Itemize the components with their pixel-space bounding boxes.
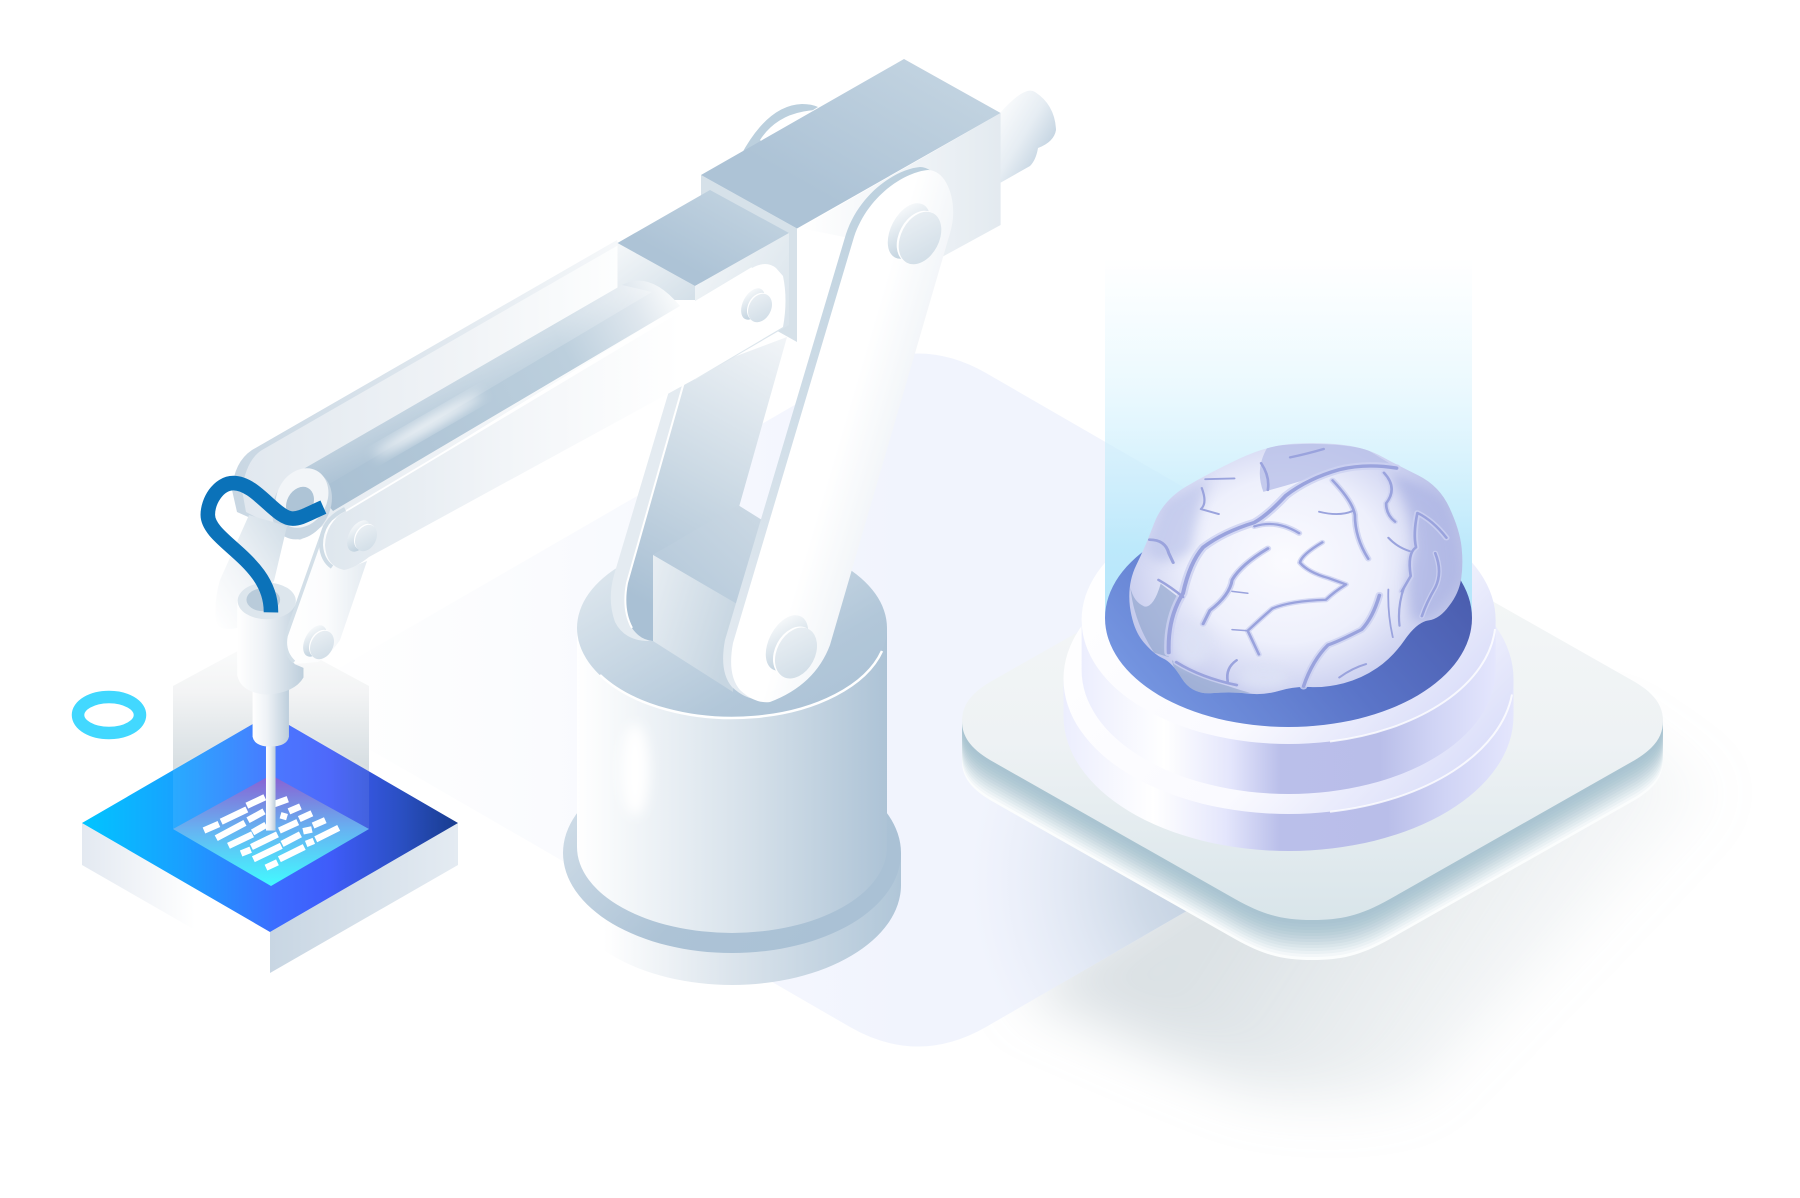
robot base — [563, 538, 901, 985]
bolts — [298, 196, 950, 686]
base highlight — [621, 724, 649, 816]
brain sulci halo — [1169, 466, 1446, 686]
back hub — [260, 459, 344, 550]
illustration: robot arm printing a chip next to a brain — [72, 59, 1663, 1105]
rear arm plate — [232, 240, 640, 540]
glass tint over chip — [173, 714, 369, 829]
brain shading — [1130, 444, 1461, 694]
soft ground shadow — [1020, 720, 1720, 1100]
hydraulic cylinder — [300, 281, 680, 511]
glass wall behind chip — [173, 633, 369, 829]
icon: brain — [1129, 443, 1462, 694]
blue disc — [1105, 509, 1472, 727]
front wrist link — [284, 526, 367, 664]
brain sulci — [1150, 449, 1446, 686]
top block — [701, 59, 1001, 342]
tool head — [237, 583, 303, 831]
pedestal — [1064, 496, 1514, 851]
second block — [618, 190, 789, 380]
background rounded diamond — [740, 354, 1186, 1046]
panel: chip base — [82, 714, 458, 973]
blue cable — [208, 483, 323, 612]
main upright link — [723, 167, 953, 702]
back wrist link — [216, 515, 287, 629]
front arm bar — [321, 264, 786, 570]
panel: rounded platform — [962, 522, 1663, 960]
end cap on top block — [1000, 91, 1056, 183]
glowing chip square — [173, 775, 369, 886]
circuit dashes — [204, 797, 339, 868]
cylinder highlight — [372, 390, 484, 460]
inner block — [653, 505, 762, 692]
rear link — [611, 337, 787, 641]
cyan ring — [78, 697, 140, 733]
light column — [1105, 258, 1472, 618]
